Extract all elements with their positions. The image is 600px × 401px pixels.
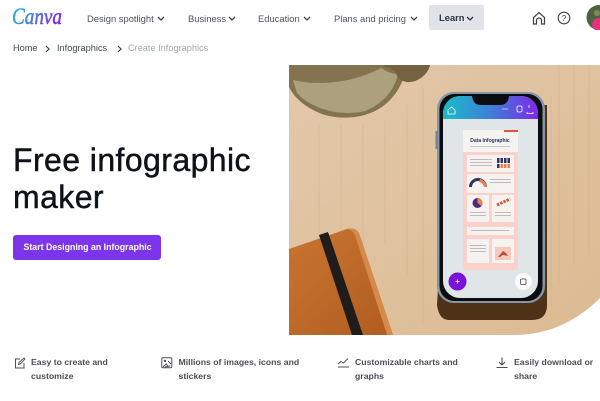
Learn menu button (429, 5, 484, 30)
heading: Free infographic (13, 142, 251, 178)
wood background (289, 65, 600, 335)
feature: easy to create: Easy to create and (31, 357, 108, 367)
logo: Canva: Canva (12, 4, 62, 29)
feature: millions of images (161, 357, 299, 381)
feature: download (496, 357, 593, 381)
call to action button: Start Designing an Infographic (24, 242, 152, 252)
navigation menu: Business (188, 12, 226, 24)
feature: download: Easily download or (514, 357, 593, 367)
heading: maker (13, 179, 104, 215)
call to action button (13, 235, 161, 260)
breadcrumb: Infographics (57, 42, 107, 52)
add button (448, 272, 466, 290)
infographic thumbnail (463, 130, 518, 270)
infographic thumbnail: Data Infographic (470, 138, 510, 144)
feature: charts: Customizable charts and (355, 357, 458, 367)
icon: help: ? (562, 13, 567, 23)
breadcrumb: Home (13, 42, 38, 52)
breadcrumb: Create Infographics (128, 42, 208, 52)
feature: easy to create (15, 357, 108, 381)
navigation menu (87, 12, 418, 24)
icon: home (532, 12, 546, 25)
feature: easy to create: customize (31, 371, 73, 381)
navigation menu: Design spotlight (87, 12, 154, 24)
cup shadow (289, 65, 430, 118)
breadcrumb (13, 42, 208, 53)
Learn menu button: Learn (439, 12, 465, 23)
icon: help (558, 12, 570, 24)
feature: millions of images: stickers (178, 371, 211, 381)
avatar (586, 5, 600, 30)
hero photo: desk with phone (289, 65, 600, 335)
feature: charts (338, 357, 458, 381)
phone screen (443, 96, 538, 298)
feature: millions of images: Millions of images, icons and (178, 357, 299, 367)
heading (13, 142, 251, 215)
navigation menu: Education (258, 12, 300, 24)
feature: charts: graphs (355, 371, 384, 381)
notebook (289, 228, 393, 335)
feature: download: share (514, 371, 537, 381)
navigation menu: Plans and pricing (334, 12, 406, 24)
pages button (515, 273, 532, 290)
phone (436, 92, 547, 320)
